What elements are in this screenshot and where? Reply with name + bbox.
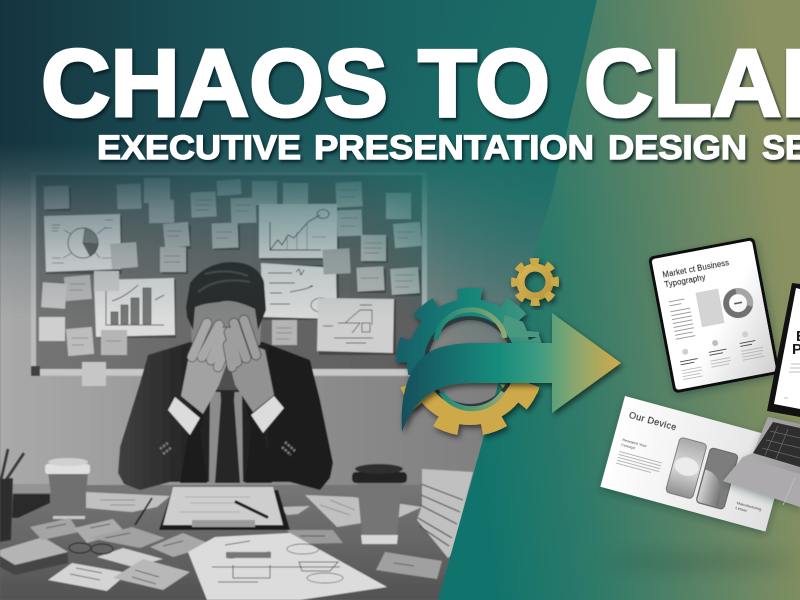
panel: slide mockup Our Device: Lesser (735, 505, 749, 513)
arrow (402, 313, 621, 432)
stack of documents (417, 469, 473, 558)
scattered notes (30, 518, 442, 591)
paper: flow diagram (317, 298, 394, 353)
face (190, 300, 262, 345)
panel: tablet mockup (648, 237, 780, 394)
inner crescent arcs (436, 310, 505, 409)
panel: tablet mockup: Typography (664, 273, 706, 289)
neck (217, 365, 238, 390)
subtitle (97, 129, 800, 167)
phone two (696, 447, 739, 510)
icon: gears and transformation arrow (402, 262, 621, 432)
sticky notes on the board (44, 178, 422, 345)
paper: line chart (259, 204, 337, 258)
note block (0, 537, 68, 575)
slide caption: Manufacturing (736, 500, 762, 512)
panel: clarity diagonal background (438, 0, 800, 600)
top teal header gradient (0, 0, 597, 343)
lapels (180, 392, 272, 483)
large sketch sheet (188, 533, 387, 600)
paper: bar chart (94, 278, 175, 337)
tablet on desk (12, 494, 50, 518)
clipboard (159, 487, 290, 530)
whiteboard (31, 172, 427, 386)
sticky notes overlapping the papers (39, 242, 351, 386)
big gear teal upper half (396, 288, 546, 378)
pen holder with pens (0, 449, 24, 542)
left hand (181, 323, 229, 414)
tablet text column (669, 298, 695, 339)
title: CHAOS (41, 30, 388, 137)
suit (118, 342, 333, 490)
left cuff (168, 397, 200, 435)
small gold gear (515, 262, 555, 302)
panel: laptop mockup (723, 283, 800, 507)
tablet three columns (677, 329, 766, 380)
subtitle: EXECUTIVE (97, 129, 301, 167)
white lid coffee cup (45, 458, 90, 519)
eyeglasses (69, 543, 113, 554)
loose papers behind clipboard (86, 492, 170, 512)
paper: pie chart (44, 214, 121, 272)
big gear gold lower half (400, 375, 544, 440)
loose pen (135, 498, 152, 525)
phone one (665, 437, 707, 499)
title: TO (418, 30, 550, 137)
slide body lines (616, 451, 662, 475)
panel: slide mockup Our Device: Concept (621, 443, 636, 451)
subtitle: DESIGN (608, 129, 747, 167)
laptop keyboard (753, 422, 800, 467)
subtitle: PRESENTATION (314, 129, 594, 167)
black lid coffee cup (352, 464, 407, 544)
title (41, 30, 800, 137)
hair (186, 262, 266, 330)
slide heading: Our Device (628, 410, 678, 432)
sleeve buttons (160, 442, 295, 455)
panel: slide mockup Our Device (600, 396, 790, 532)
slide subheading: Research Your (622, 438, 648, 449)
tie (215, 388, 240, 483)
desk (0, 484, 800, 600)
right cuff (251, 396, 284, 433)
tablet donut chart (724, 289, 752, 317)
right hand (226, 320, 274, 412)
tablet photo block (695, 289, 725, 327)
tablet heading: Market ct Business (662, 258, 730, 280)
device shadow (605, 555, 795, 569)
laptop palm rest (723, 457, 800, 507)
laptop base (723, 417, 800, 507)
paper: handwritten list (261, 263, 337, 319)
shirt (209, 392, 243, 483)
desk clutter (0, 449, 473, 600)
laptop screen (767, 283, 800, 417)
inner dark ring (426, 318, 514, 406)
man with hands over face (118, 262, 333, 490)
